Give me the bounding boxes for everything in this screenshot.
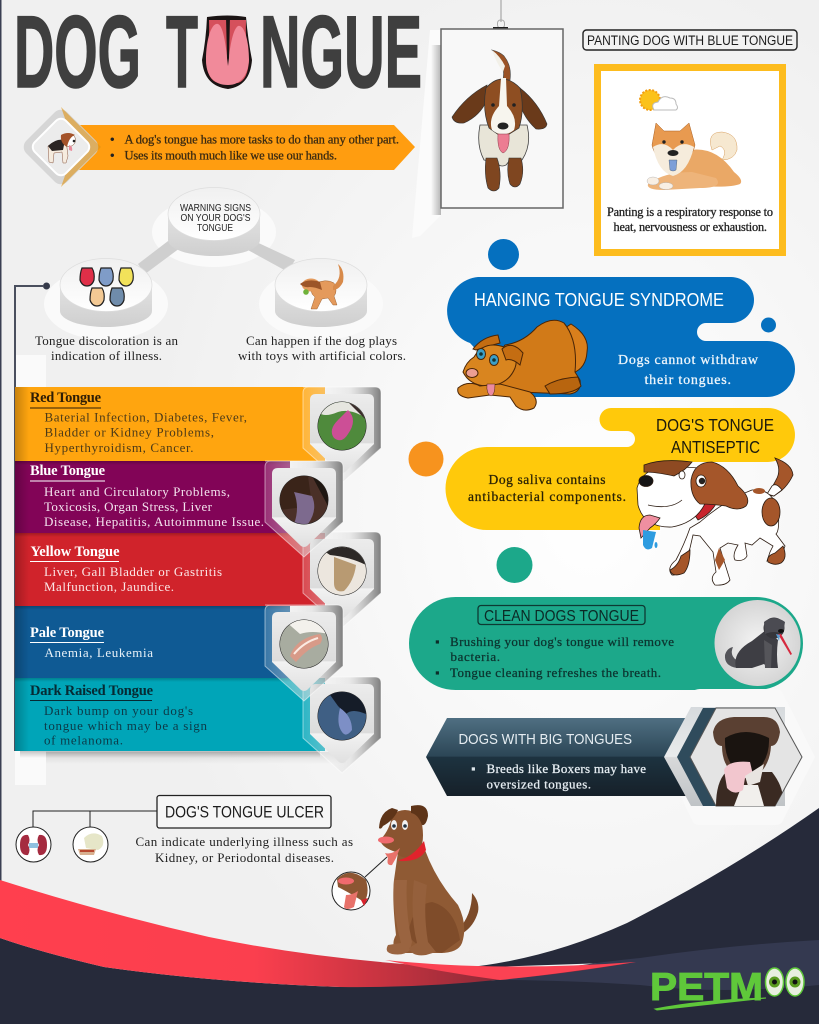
- text: ulcer description: Can indicate underlying illness such as: [136, 834, 353, 849]
- panel: panting dog with blue tongue: [583, 30, 797, 252]
- icon: diamond with beagle: [20, 106, 102, 188]
- disk: dog playing with toy: [275, 258, 367, 327]
- left edge line: [0, 0, 2, 890]
- bar: pale tongue: Anemia, Leukemia: [44, 645, 153, 660]
- banner: tongue tasks: •: [110, 148, 115, 162]
- panel: clean dogs tongue: bacteria.: [450, 649, 500, 664]
- banner: tongue tasks: [20, 106, 415, 188]
- disk: warning signs: [168, 188, 260, 256]
- bar: red tongue: Baterial Infection, Diabetes, Fever,: [44, 410, 247, 424]
- caption: Panting is a respiratory response to: [607, 205, 773, 219]
- disk: warning signs: ON YOUR DOG'S: [180, 213, 251, 224]
- caption: [607, 205, 773, 234]
- dog illustration: black dog with long tongue: [725, 618, 792, 668]
- heading box: [583, 30, 797, 50]
- connector line to tongue list: [15, 282, 50, 751]
- logo: petmoo: [650, 966, 804, 1010]
- bar: pale tongue: [15, 606, 290, 678]
- dog illustration: orange dog with hanging tongue: [458, 320, 587, 410]
- banner: tongue tasks: •: [110, 132, 115, 146]
- icon: binder clip and string: [493, 0, 508, 34]
- panel: hanging tongue syndrome: HANGING TONGUE SYNDROME: [474, 290, 724, 310]
- bar: dark raised tongue: Dark Raised Tongue: [30, 683, 154, 699]
- icon: kidneys: [16, 827, 51, 862]
- text: tongue discoloration: [35, 333, 178, 363]
- panel: clean dogs tongue: Tongue cleaning refreshes the breath.: [450, 665, 661, 680]
- bar: dark raised tongue: [15, 678, 325, 751]
- text: artificial colors: [238, 333, 406, 363]
- dog illustration: brown sitting dog: [378, 805, 478, 955]
- bar: blue tongue: Disease, Hepatitis, Autoimmune Issue.: [44, 514, 264, 529]
- text: artificial colors: with toys with artificial colors.: [238, 348, 406, 363]
- dog illustration: spotted dog with drooling tongue: [637, 458, 793, 585]
- heading box: PANTING DOG WITH BLUE TONGUE: [587, 33, 793, 48]
- bar: yellow tongue: Liver, Gall Bladder or Gastritis: [44, 564, 222, 579]
- panel: dogs with big tongues: oversized tongues.: [486, 776, 591, 792]
- panel: dogs with big tongues: Breeds like Boxers may have: [486, 761, 646, 776]
- text: ulcer description: Kidney, or Periodontal diseases.: [155, 850, 334, 865]
- badge: blue tongue photo: [265, 461, 343, 557]
- bar: blue tongue: Blue Tongue: [30, 463, 106, 479]
- bar: red tongue: Hyperthyroidism, Cancer.: [44, 440, 194, 455]
- disk: tongue colors: [60, 258, 152, 327]
- bar: yellow tongue: Malfunction, Jaundice.: [44, 579, 174, 594]
- bar: dark raised tongue: Dark bump on your dog's: [44, 703, 193, 718]
- text: tongue discoloration: Tongue discoloration is an: [35, 333, 178, 348]
- bottom wave background: [0, 808, 819, 1024]
- panel: dog's tongue antiseptic: antibacterial components.: [468, 489, 626, 504]
- icon: sun and cloud: [640, 90, 678, 110]
- bar: red tongue: Red Tongue: [30, 390, 102, 406]
- panel: dog's tongue ulcer: [16, 796, 353, 865]
- dog illustration: front-facing spaniel: [452, 50, 547, 191]
- panel: dog's tongue antiseptic: ANTISEPTIC: [671, 437, 760, 457]
- panel: clean dogs tongue: [409, 547, 803, 690]
- badge: red tongue photo: [303, 387, 381, 483]
- panel: hanging tongue syndrome: [447, 239, 795, 410]
- bar: dark raised tongue: tongue which may be a sign: [44, 718, 208, 733]
- icon: jaw skull: [73, 827, 108, 862]
- background light facets: [412, 30, 441, 238]
- callout: ulcer close-up: [332, 857, 387, 910]
- heading box: DOG'S TONGUE ULCER: [165, 802, 324, 822]
- banner: tongue tasks: Uses its mouth much like we use our hands.: [124, 148, 337, 162]
- panel: dog's tongue antiseptic: [408, 408, 795, 585]
- panel: tongue color list: [15, 387, 381, 773]
- panel: dogs with big tongues: DOGS WITH BIG TONGUES: [458, 731, 632, 748]
- bar: blue tongue: [15, 461, 290, 533]
- warning signs diagram: [15, 188, 406, 751]
- panel: clean dogs tongue: ▪: [435, 665, 440, 680]
- text: tongue discoloration: indication of illness.: [51, 348, 162, 363]
- panel: hanging tongue syndrome: Dogs cannot withdraw: [618, 353, 759, 368]
- panel: dog's tongue antiseptic: DOG'S TONGUE: [656, 415, 774, 435]
- title: [14, 0, 422, 109]
- bar: blue tongue: Toxicosis, Organ Stress, Liver: [44, 499, 213, 514]
- panel: clean dogs tongue: Brushing your dog's tongue will remove: [450, 634, 674, 649]
- icon: tongue letter O: [202, 16, 252, 89]
- bar: dark raised tongue: of melanoma.: [44, 732, 123, 748]
- badge: pale tongue photo: [265, 605, 343, 701]
- disk: warning signs: TONGUE: [197, 223, 233, 234]
- disk: warning signs: WARNING SIGNS: [180, 203, 251, 214]
- bar: red tongue: [15, 387, 325, 461]
- badge: yellow tongue photo: [303, 532, 381, 628]
- bar: blue tongue: Heart and Circulatory Problems,: [44, 484, 230, 499]
- panel: hanging tongue syndrome: their tongues.: [644, 373, 731, 388]
- icon: logo eyes: [766, 968, 804, 996]
- bar: yellow tongue: Yellow Tongue: [30, 544, 120, 560]
- logo: petmoo: PETM: [650, 966, 763, 1009]
- heading box: [157, 796, 331, 828]
- panel: dogs with big tongues: ▪: [471, 761, 476, 776]
- bar: pale tongue: Pale Tongue: [30, 625, 105, 641]
- bar: red tongue: Bladder or Kidney Problems,: [44, 424, 214, 440]
- caption: heat, nervousness or exhaustion.: [614, 220, 767, 234]
- poster: hanging dog picture: [431, 0, 563, 215]
- text: artificial colors: Can happen if the dog plays: [246, 333, 397, 348]
- panel: clean dogs tongue: ▪: [435, 634, 440, 649]
- panel: dogs with big tongues: [426, 689, 802, 806]
- heading box: CLEAN DOGS TONGUE: [484, 608, 639, 625]
- photo: boxer dog: [713, 717, 783, 806]
- dog illustration: shiba: [647, 123, 741, 190]
- panel: dog's tongue antiseptic: Dog saliva contains: [488, 472, 606, 487]
- text: ulcer description: [136, 834, 353, 865]
- badge: dark raised tongue photo: [303, 677, 381, 773]
- banner: tongue tasks: A dog's tongue has more tasks to do than any other part.: [124, 132, 399, 146]
- bar: yellow tongue: [15, 533, 325, 606]
